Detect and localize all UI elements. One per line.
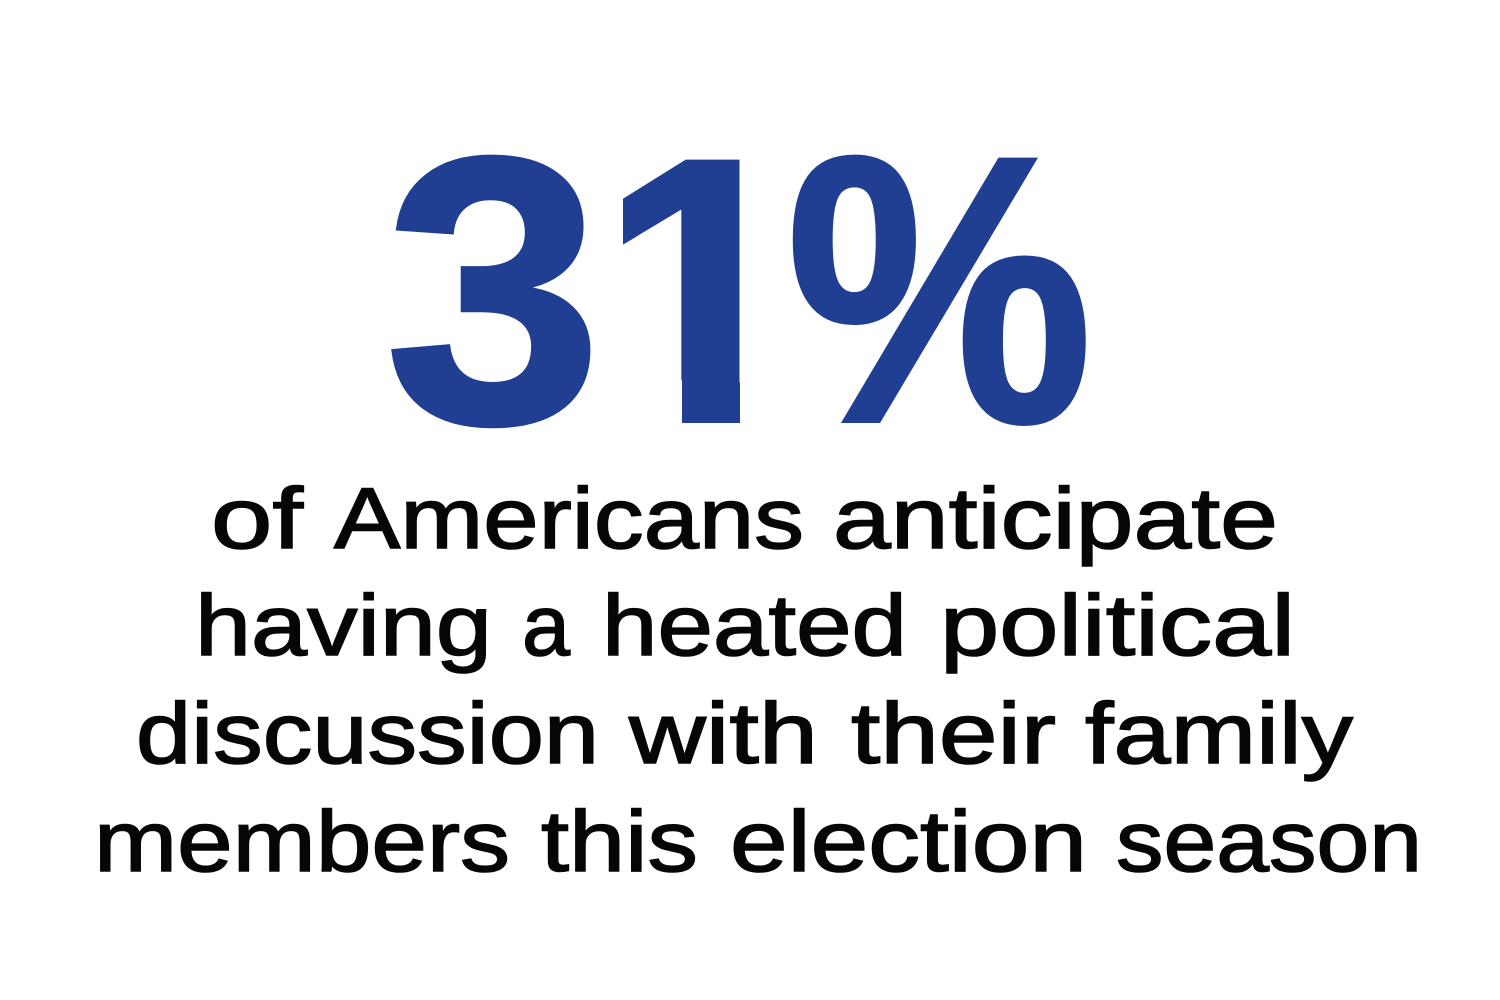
description text block bbox=[94, 471, 1422, 890]
line 3: family bbox=[1085, 686, 1353, 782]
line 2: heated bbox=[602, 578, 907, 674]
line 3: with bbox=[628, 686, 818, 782]
line 4: election bbox=[730, 794, 1087, 890]
headline statistic: 31%: 3 bbox=[384, 78, 602, 503]
line 4 bbox=[94, 794, 1422, 890]
line 2: political bbox=[940, 578, 1295, 674]
line 4: members bbox=[94, 794, 510, 890]
line 2: a bbox=[522, 578, 570, 674]
line 3 bbox=[136, 686, 1353, 782]
infographic canvas bbox=[100, 154, 1417, 873]
line 2: having bbox=[195, 578, 492, 674]
line 1 bbox=[211, 471, 1278, 567]
line 1: Americans bbox=[334, 471, 804, 567]
headline statistic: 31% bbox=[391, 154, 1086, 428]
headline statistic: 31%: % bbox=[786, 77, 1093, 502]
line 3: their bbox=[851, 686, 1056, 782]
line 1: of bbox=[211, 471, 304, 567]
line 2 bbox=[195, 578, 1295, 674]
line 4: season bbox=[1116, 794, 1422, 890]
line 1: anticipate bbox=[833, 471, 1278, 567]
headline statistic: 31%: 1 bbox=[592, 79, 810, 504]
line 4: this bbox=[541, 794, 698, 890]
line 3: discussion bbox=[136, 686, 599, 782]
